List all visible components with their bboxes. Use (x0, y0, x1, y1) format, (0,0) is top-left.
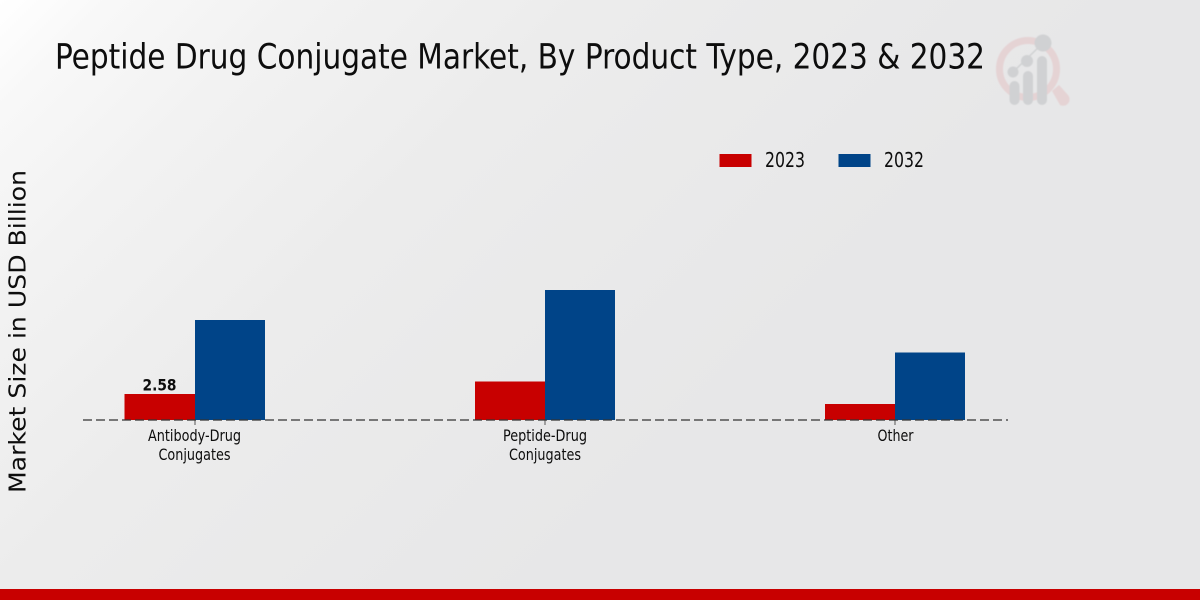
footer bar (0, 589, 1200, 600)
bar chart (83, 290, 1008, 464)
baseline (83, 419, 1008, 421)
group: Antibody-Drug Conjugates: Conjugates (158, 445, 230, 464)
legend (720, 148, 924, 172)
group: Antibody-Drug Conjugates: 2.58 (142, 376, 176, 394)
legend swatch 2032 (838, 154, 870, 167)
legend label 2023: 2023 (765, 148, 805, 172)
group: Peptide-Drug Conjugates: Peptide-Drug (503, 426, 587, 445)
group: Other: Other (878, 426, 914, 445)
title: Peptide Drug Conjugate Market, By Product Type, 2023 & 2032 (55, 38, 985, 78)
y axis title: Market Size in USD Billion (4, 170, 32, 493)
legend label 2032: 2032 (884, 148, 924, 172)
group: Antibody-Drug Conjugates: Antibody-Drug (148, 426, 241, 445)
group: Antibody-Drug Conjugates (124, 320, 265, 464)
group: Other (825, 352, 965, 445)
group: Peptide-Drug Conjugates: Conjugates (509, 445, 581, 464)
legend swatch 2023 (720, 154, 752, 167)
group: Peptide-Drug Conjugates (475, 290, 615, 464)
icon: magnifier logo watermark (1000, 34, 1070, 106)
